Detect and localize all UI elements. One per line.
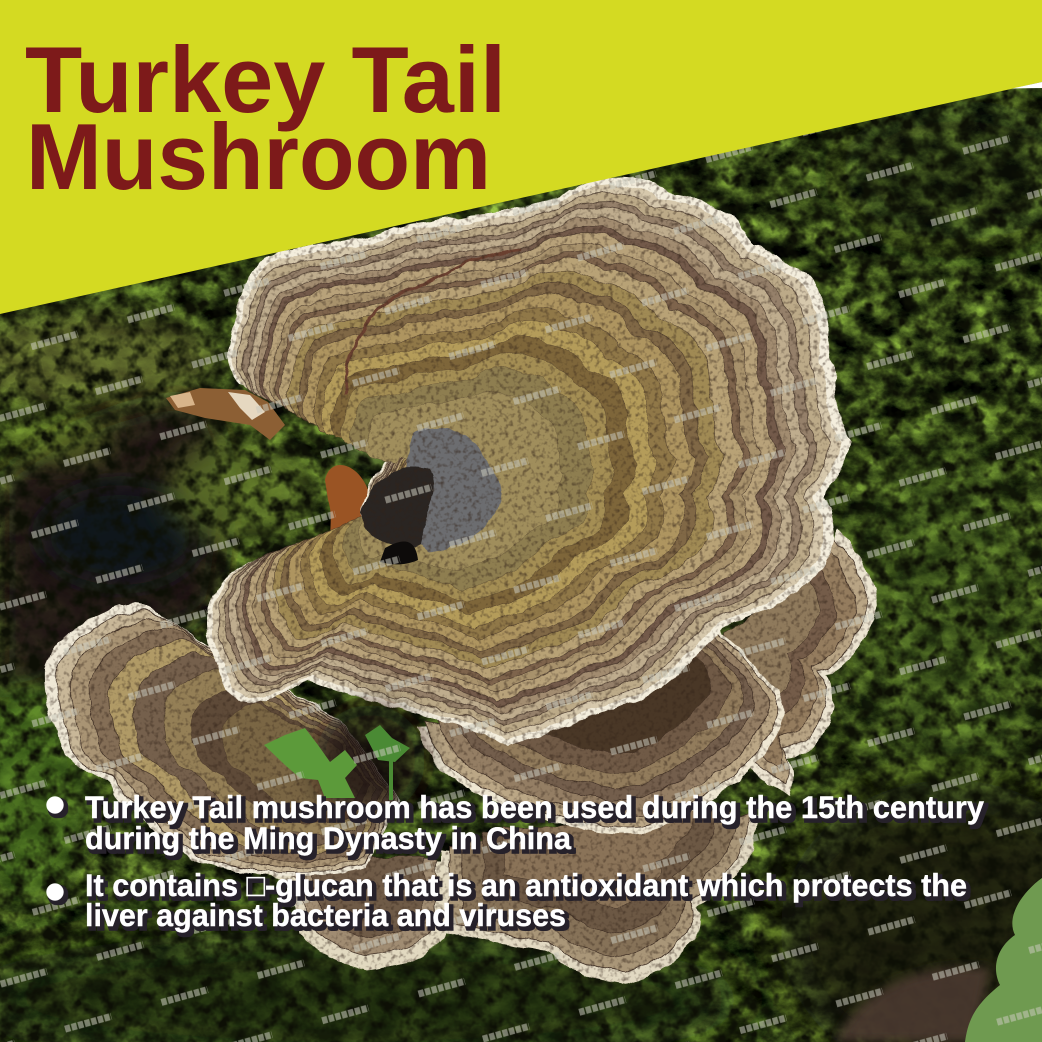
lobe: under the main cap — [418, 622, 785, 835]
stump under the cap — [325, 465, 405, 563]
bullet 1: Turkey Tail mushroom has been used during the 15th century — [85, 789, 984, 825]
title — [25, 27, 506, 209]
small green seedling — [264, 725, 410, 800]
orange lichen bits — [166, 388, 285, 440]
shadow under the cap — [315, 705, 425, 815]
groove on the upper cap — [345, 250, 520, 395]
lobe: lower layer bottom left — [190, 854, 445, 970]
lobe: lower layer bottom right — [440, 805, 758, 984]
bullet 2 — [46, 867, 967, 933]
dark lower-middle ground — [0, 930, 750, 1042]
dead brown leaf — [835, 967, 990, 1042]
mushroom: dark root lump — [360, 468, 434, 547]
bullet 2: It contains □-glucan that is an antioxidant which protects the — [85, 867, 967, 903]
moss in the notch of the cap — [343, 405, 407, 465]
moss clump next to the log — [168, 440, 312, 540]
bright moss streak on the log — [0, 420, 115, 460]
moss on the upper left — [0, 312, 220, 408]
mushroom: back lobes — [45, 177, 877, 984]
dark top-right undergrowth — [840, 100, 1042, 240]
lobe: lower left — [45, 603, 400, 876]
moss at the lower left — [0, 680, 85, 900]
bullet 1: during the Ming Dynasty in China — [85, 820, 571, 856]
white corner sliver — [1012, 82, 1042, 88]
black gap below the root — [380, 541, 418, 564]
mushroom: grey core — [400, 428, 502, 552]
title: Mushroom — [26, 104, 491, 209]
lobe: back right — [720, 528, 877, 795]
yellow title banner — [0, 0, 1042, 314]
bullet list — [46, 789, 984, 933]
dark lower-right ground — [780, 780, 1042, 1042]
shiny black log patch — [40, 485, 200, 585]
mushroom: main cap rings — [207, 177, 851, 746]
title: Turkey Tail — [25, 27, 506, 132]
moss on the right — [860, 440, 1040, 800]
bullet 1 — [46, 789, 984, 856]
bullet 2: liver against bacteria and viruses — [85, 897, 566, 933]
green leaf at the corner — [965, 878, 1042, 1042]
dark log on the left — [0, 400, 227, 700]
